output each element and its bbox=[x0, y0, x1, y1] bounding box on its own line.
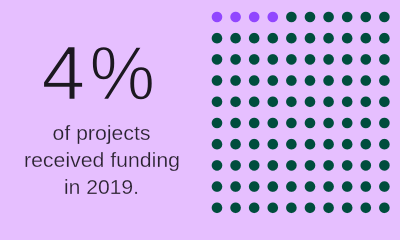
big statistic: 4%: 4 bbox=[42, 31, 85, 116]
highlighted purple dots bbox=[212, 12, 278, 22]
remaining green dots bbox=[212, 12, 390, 213]
dot grid: 4 of 100 highlighted bbox=[212, 12, 390, 213]
caption text: of projects bbox=[52, 123, 150, 145]
big statistic: 4%: % bbox=[90, 30, 155, 116]
big statistic: 4% bbox=[42, 30, 155, 116]
caption text: in 2019. bbox=[64, 177, 139, 199]
caption text bbox=[24, 123, 180, 199]
caption text: received funding bbox=[24, 150, 180, 172]
